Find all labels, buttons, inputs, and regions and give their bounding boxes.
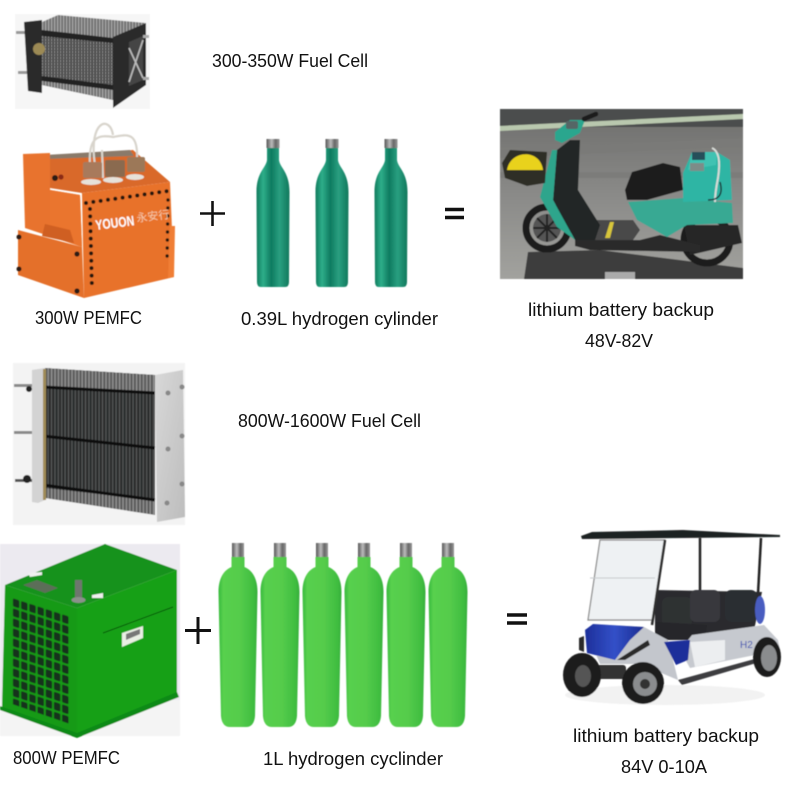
photo: green 800W PEMFC unit	[0, 544, 180, 738]
cylinder 3	[374, 139, 408, 287]
label: lithium battery backup 48V-82V: lithium battery backup	[528, 300, 714, 320]
photo: hydrogen scooter	[500, 109, 743, 279]
label: lithium battery backup 84V 0-10A: 84V 0-10A	[621, 757, 707, 777]
label: lithium battery backup 48V-82V: 48V-82V	[585, 331, 653, 351]
image: six 1L green hydrogen cylinders	[218, 543, 468, 727]
label: 0.39L hydrogen cylinder: 0.39L hydrogen cylinder	[241, 309, 438, 329]
photo: orange 300W PEMFC unit: YOUON	[94, 212, 135, 233]
cylinder 5	[386, 543, 426, 727]
cylinder 1	[256, 139, 290, 287]
photo: hydrogen golf cart: H2	[740, 640, 753, 651]
photo: 300-350W fuel cell stack	[15, 14, 150, 109]
cylinder 2	[260, 543, 300, 727]
label: 1L hydrogen cylinder: 1L hydrogen cyclinder	[263, 749, 443, 769]
icon: equals sign, bottom row	[507, 615, 527, 623]
icon: equals sign, top row	[445, 210, 464, 218]
cylinder 3	[302, 543, 342, 727]
photo: orange 300W PEMFC unit	[16, 124, 175, 298]
label: 300W PEMFC: 300W PEMFC	[35, 308, 142, 328]
label: lithium battery backup 84V 0-10A: lithium battery backup	[573, 726, 759, 746]
label: lithium battery backup 48V-82V	[528, 300, 714, 351]
photo: hydrogen golf cart	[563, 530, 781, 705]
cylinder 2	[316, 139, 348, 287]
image: three 0.39L teal hydrogen cylinders	[256, 139, 408, 287]
cylinder 1	[218, 543, 258, 727]
icon: plus sign, bottom row	[185, 617, 211, 644]
cylinder 6	[428, 543, 468, 727]
photo: 800W-1600W fuel cell stack	[13, 363, 185, 525]
cylinder 4	[344, 543, 384, 727]
label: lithium battery backup 84V 0-10A	[573, 726, 759, 777]
label: 300-350W fuel cell: 300-350W Fuel Cell	[212, 51, 368, 71]
label: 800W-1600W fuel cell: 800W-1600W Fuel Cell	[238, 411, 421, 431]
icon: plus sign, top row	[200, 201, 225, 226]
label: 800W PEMFC: 800W PEMFC	[13, 748, 120, 768]
photo: orange 300W PEMFC unit: 永安行	[136, 207, 170, 225]
